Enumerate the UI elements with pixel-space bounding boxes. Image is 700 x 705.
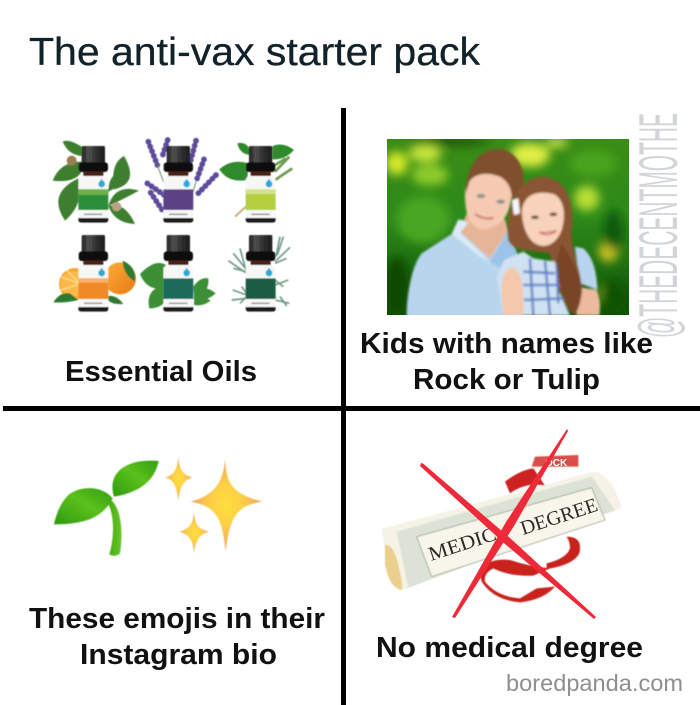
grid: vertical divider	[341, 108, 346, 705]
panel: emojis	[29, 457, 325, 671]
icon: sparkles	[165, 457, 263, 553]
bottle: eucalyptus	[53, 141, 139, 224]
image: rolled diploma: DEGREE	[518, 494, 601, 540]
image: rolled diploma	[382, 455, 622, 602]
bottle: tea tree	[228, 235, 290, 312]
label: emojis: Instagram bio	[80, 639, 277, 671]
image: rolled diploma: OCK	[545, 458, 568, 469]
panel: no medical degree	[376, 429, 683, 696]
stock watermark banner	[532, 455, 578, 467]
panel: essential oils	[53, 140, 294, 388]
label: kids names: Kids with names like	[360, 328, 653, 360]
label: emojis	[29, 603, 325, 671]
label: no medical degree: No medical degree	[376, 632, 643, 664]
bottle: orange	[53, 235, 136, 312]
photo: two children	[383, 138, 629, 317]
title: The anti-vax starter pack	[29, 31, 481, 74]
diploma text: MEDIC	[426, 523, 499, 566]
image: essential oil bottles	[53, 140, 294, 312]
bottle: peppermint	[140, 235, 216, 312]
label: emojis: These emojis in their	[29, 603, 325, 635]
panel: kids	[360, 113, 689, 396]
label: kids names: Rock or Tulip	[413, 364, 600, 396]
girl	[497, 177, 600, 315]
label: essential oils: Essential Oils	[65, 356, 257, 388]
icon: red cross mark	[420, 429, 596, 619]
bottle: lemongrass	[219, 143, 294, 223]
icon: seedling	[54, 461, 159, 556]
bottle: lavender	[147, 140, 216, 223]
label: kids names	[360, 328, 653, 396]
watermark: boredpanda: boredpanda.com	[506, 670, 683, 696]
grid: horizontal divider	[3, 406, 700, 411]
boy	[407, 149, 524, 317]
